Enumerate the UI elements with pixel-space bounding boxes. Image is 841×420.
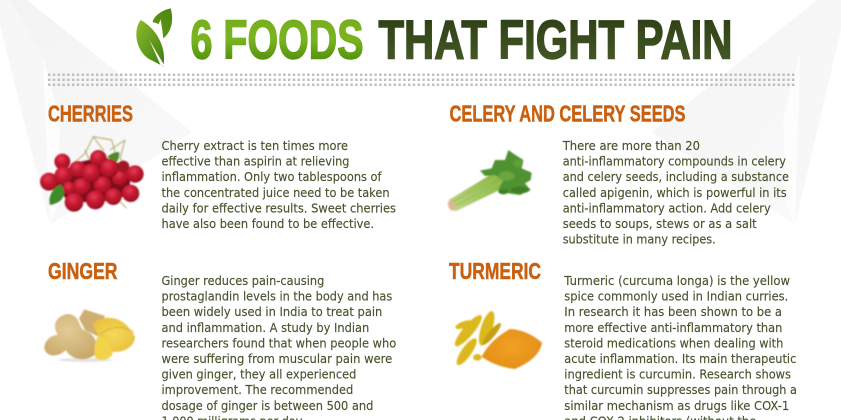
text: turmeric: spice commonly used in Indian curries.: [564, 289, 788, 304]
text: celery: [562, 138, 789, 247]
text: ginger: were suffering from muscular pain were: [162, 351, 393, 366]
image: celery: [446, 150, 532, 212]
icon: leaves logo: [136, 8, 172, 66]
text: celery: anti-inflammatory action. Add celery: [563, 200, 771, 215]
title: 6 FOODS: [190, 10, 364, 70]
text: turmeric: [563, 273, 797, 420]
background rays: [0, 0, 841, 225]
heading: turmeric: TURMERIC: [449, 258, 541, 284]
title: THAT FIGHT PAIN: [378, 10, 732, 70]
text: ginger: and inflammation. A study by Indian: [162, 320, 369, 335]
text: turmeric: more effective anti-inflammatory than: [564, 320, 782, 335]
panel: ginger: [44, 258, 397, 420]
heading: ginger: GINGER: [48, 258, 118, 284]
text: celery: There are more than 20: [562, 138, 700, 153]
text: ginger: researchers found that when people who: [162, 335, 397, 350]
text: ginger: dosage of ginger is between 500 and: [162, 398, 373, 413]
panel: turmeric: [449, 258, 797, 420]
image: cherries: [40, 137, 144, 212]
text: ginger: improvement. The recommended: [162, 382, 353, 397]
text: turmeric: that curcumin suppresses pain through a: [564, 382, 797, 397]
text: turmeric: similar mechanism as drugs like COX-1: [564, 398, 789, 413]
text: cherries: inflammation. Only two tablespoons of: [162, 169, 382, 184]
heading: cherries: CHERRIES: [48, 101, 133, 127]
panel: celery and celery seeds: [446, 101, 789, 247]
text: turmeric: ingredient is curcumin. Research shows: [564, 367, 791, 382]
text: cherries: daily for effective results. Sweet cherries: [162, 200, 396, 215]
text: celery: called apigenin, which is powerful in its: [563, 185, 787, 200]
text: cherries: [162, 138, 396, 231]
text: cherries: effective than aspirin at relieving: [162, 154, 350, 169]
text: ginger: been widely used in India to treat pain: [162, 304, 382, 319]
title: [190, 10, 732, 70]
text: cherries: have also been found to be effective.: [162, 216, 374, 231]
text: cherries: Cherry extract is ten times more: [162, 138, 348, 153]
text: celery: seeds to soups, stews or as a salt: [563, 216, 757, 231]
dotted divider: [47, 73, 796, 88]
text: turmeric: acute inflammation. Its main therapeutic: [564, 351, 796, 366]
text: turmeric: Turmeric (curcuma longa) is the yellow: [563, 273, 790, 288]
text: turmeric: In research it has been shown to be a: [564, 304, 782, 319]
text: ginger: Ginger reduces pain-causing: [162, 273, 324, 288]
heading: celery: CELERY AND CELERY SEEDS: [450, 101, 686, 127]
text: celery: substitute in many recipes.: [563, 232, 716, 247]
text: celery: anti-inflammatory compounds in celery: [563, 154, 786, 169]
text: celery: and celery seeds, including a substance: [563, 169, 789, 184]
text: ginger: [162, 273, 397, 420]
text: ginger: given ginger, they all experienced: [162, 367, 356, 382]
panel: cherries: [40, 101, 396, 231]
text: turmeric: steroid medications when dealing with: [564, 335, 783, 350]
text: cherries: the concentrated juice need to be taken: [162, 185, 390, 200]
image: ginger: [44, 309, 135, 362]
image: turmeric: [451, 309, 542, 369]
text: ginger: prostaglandin levels in the body and has: [162, 289, 392, 304]
